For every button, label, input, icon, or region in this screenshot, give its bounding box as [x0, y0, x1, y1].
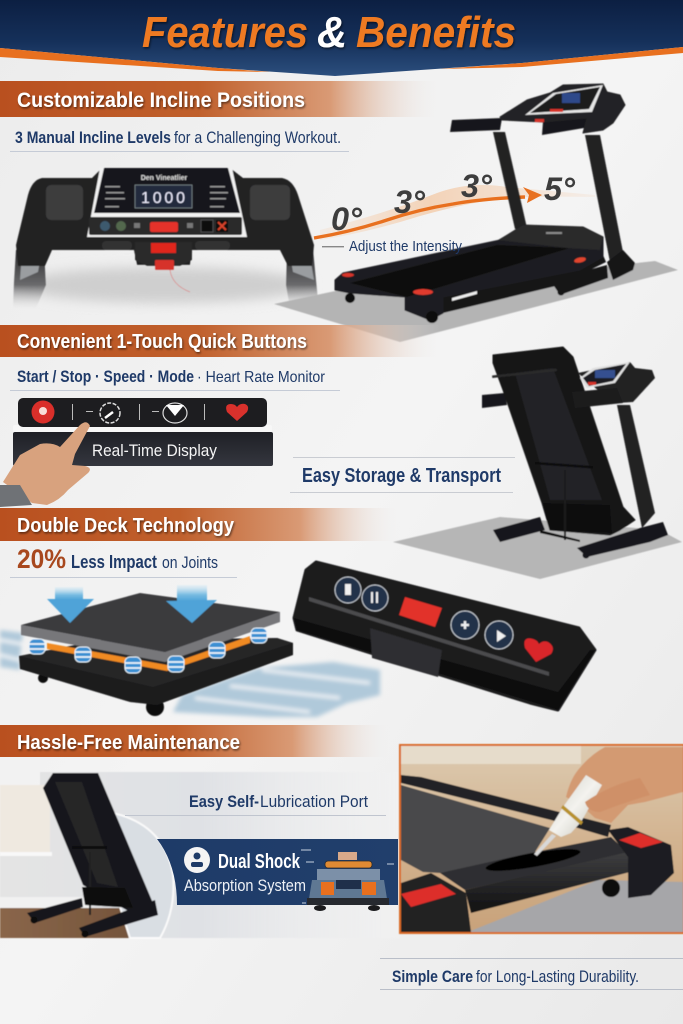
incline graphic	[314, 168, 595, 240]
panel brand: Den Vineatlier	[141, 175, 188, 182]
heading bar: Convenient 1-Touch Quick Buttons	[17, 331, 307, 353]
console body	[16, 168, 314, 266]
section: maintenance	[0, 725, 683, 990]
top rail	[401, 775, 611, 837]
degree labels: 0°	[331, 201, 362, 237]
heading bar	[0, 725, 390, 757]
wheels	[38, 673, 164, 716]
panel small text	[105, 186, 228, 207]
window sill	[0, 852, 52, 856]
photo frame	[400, 745, 683, 933]
pointing hand	[0, 422, 90, 507]
degree labels: 3°	[394, 184, 425, 220]
button panel	[13, 398, 273, 466]
degree labels: 3°	[461, 168, 492, 204]
impact stat: 20%	[17, 544, 66, 574]
console	[572, 362, 655, 408]
lcd	[135, 185, 192, 208]
mini deck icon	[301, 850, 394, 911]
console legs	[13, 250, 318, 308]
handlebars	[450, 118, 590, 135]
rear upright	[617, 405, 655, 528]
real-time display box	[13, 425, 273, 466]
wood floor	[0, 908, 165, 938]
arrow down right	[166, 585, 217, 623]
degree labels: 5°	[544, 171, 575, 207]
header banner	[0, 0, 683, 76]
arrow down left	[47, 587, 94, 623]
room wall	[0, 772, 400, 938]
treadmill with mat	[274, 84, 678, 342]
dual shock banner: Absorption System	[184, 876, 306, 895]
heading bar	[0, 325, 440, 357]
impact stat	[10, 544, 237, 578]
centre panel	[87, 168, 247, 237]
impact stat: Less Impact	[71, 552, 157, 572]
circular highlight	[105, 813, 173, 938]
adjust the intensity: Adjust the Intensity	[349, 238, 462, 255]
lubrication text: Easy Self-	[189, 792, 259, 811]
panel strip	[309, 597, 549, 676]
red heart	[524, 638, 553, 662]
base feet	[493, 517, 668, 558]
subheading text	[10, 367, 340, 391]
title: &	[317, 8, 347, 57]
banner text: Dual Shock	[218, 851, 301, 873]
section: 1-touch buttons	[0, 325, 682, 579]
side rail top	[440, 837, 628, 890]
rear foot and base	[550, 250, 635, 296]
control panel close-up	[294, 562, 595, 710]
springs	[29, 628, 267, 673]
room scene	[0, 772, 400, 938]
carpet	[468, 880, 683, 932]
motion streaks	[0, 630, 380, 717]
orange header stripe left	[0, 48, 270, 72]
subheading text: for a Challenging Workout.	[174, 128, 341, 147]
impact stat: on Joints	[162, 553, 218, 572]
subheading text	[10, 128, 349, 152]
subheading text: · Heart Rate Monitor	[197, 369, 326, 386]
top plate	[21, 612, 280, 662]
heading bar: Hassle-Free Maintenance	[17, 732, 240, 754]
floor mat	[393, 517, 682, 579]
tab	[370, 628, 442, 677]
button glyphs	[345, 584, 506, 642]
section: double deck	[0, 508, 595, 717]
oil bottle	[534, 775, 602, 856]
icon: speed gauge	[86, 403, 120, 423]
folded treadmill	[393, 347, 682, 579]
right end cap	[608, 827, 674, 898]
wood planks	[401, 746, 581, 764]
lubrication photo	[400, 745, 683, 933]
left handle	[482, 393, 507, 408]
icon: start button	[32, 400, 54, 424]
real-time display box: Real-Time Display	[92, 441, 217, 460]
belt	[401, 785, 550, 873]
round buttons	[335, 577, 513, 649]
panel body	[294, 562, 595, 710]
lubrication text: Lubrication Port	[260, 792, 368, 811]
incline arrow	[314, 187, 542, 238]
icon: person badge	[184, 847, 210, 873]
red start button	[399, 597, 442, 627]
heading bar: Customizable Incline Positions	[17, 89, 305, 112]
title: Benefits	[356, 8, 516, 57]
console shadow	[20, 267, 310, 303]
right wheel	[602, 879, 620, 897]
treadmill screen	[562, 93, 580, 103]
treadmill console	[500, 84, 625, 133]
subheading text: Start / Stop · Speed · Mode	[17, 367, 194, 386]
light band	[320, 185, 595, 240]
right speaker	[250, 185, 290, 220]
lower plate	[19, 638, 293, 705]
lubrication text	[125, 792, 386, 816]
port slot	[485, 845, 581, 875]
baseboard	[0, 897, 90, 908]
folded treadmill	[27, 773, 158, 938]
hand	[566, 747, 683, 823]
simple care text	[380, 958, 683, 990]
icon: red heart	[226, 404, 248, 421]
touch bar	[18, 398, 267, 427]
deck	[335, 225, 606, 323]
subheading text: 3 Manual Incline Levels	[15, 128, 171, 147]
degree labels	[331, 168, 575, 237]
button strip	[89, 217, 242, 235]
lcd: 1000	[141, 190, 185, 207]
title: Features	[142, 8, 308, 57]
heading bar	[0, 508, 400, 541]
title	[142, 8, 516, 57]
window	[0, 785, 50, 852]
lower controls	[102, 241, 230, 292]
orange header stripe right	[440, 47, 683, 69]
dividers	[72, 404, 205, 420]
dual shock banner	[157, 839, 398, 911]
simple care text: for Long-Lasting Durability.	[476, 967, 639, 986]
icon: mode heart	[152, 403, 187, 423]
left speaker	[46, 185, 83, 220]
left end cap	[401, 873, 471, 932]
uprights	[493, 132, 623, 262]
section: customizable incline	[0, 81, 678, 342]
heading bar	[0, 81, 440, 117]
floor mat	[274, 261, 678, 342]
console photo	[13, 168, 318, 308]
simple care text: Simple Care	[392, 967, 473, 986]
folded deck	[493, 347, 635, 535]
heading bar: Double Deck Technology	[17, 515, 235, 537]
side rail cylinder	[465, 852, 630, 913]
deck bar and struts	[492, 369, 612, 542]
double deck illustration	[19, 585, 293, 716]
orange core	[47, 636, 250, 671]
easy storage text: Easy Storage & Transport	[302, 465, 501, 487]
thumb	[585, 778, 650, 812]
